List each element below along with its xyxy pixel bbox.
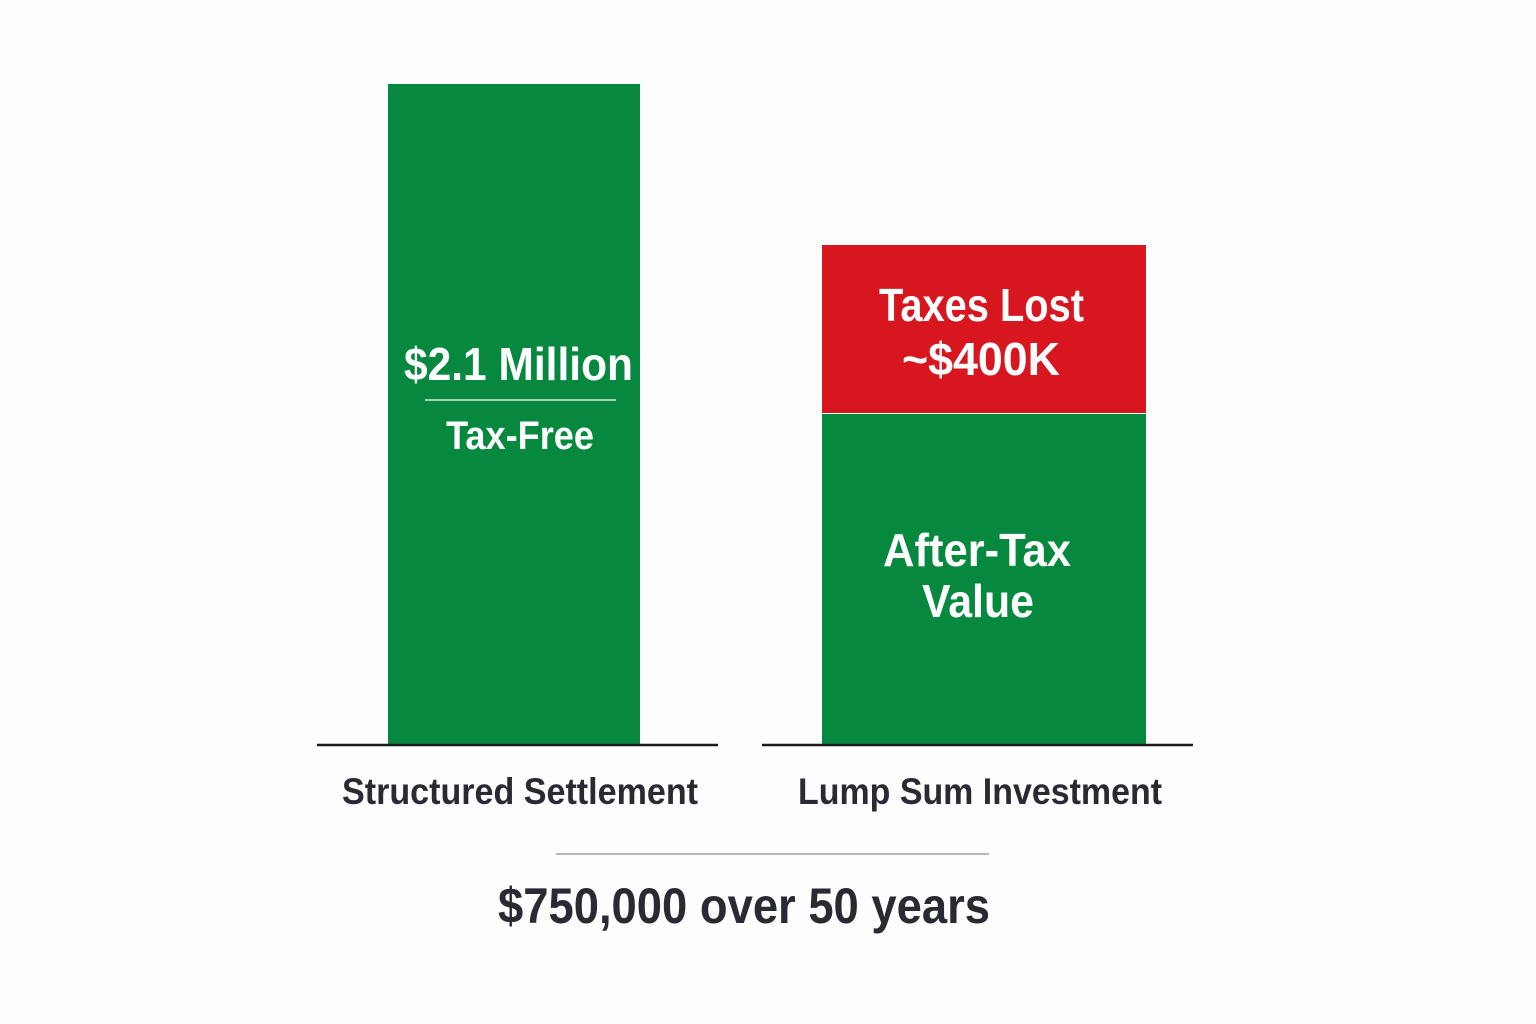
label: Tax-Free: Tax-Free <box>446 414 594 458</box>
label: $2.1 Million: $2.1 Million <box>404 338 633 390</box>
segment: taxes lost: ~$400K <box>902 333 1060 385</box>
segment: taxes lost <box>822 245 1146 413</box>
axis label: lump sum investment: Lump Sum Investment <box>798 771 1162 812</box>
footer caption: $750,000 over 50 years <box>498 878 990 934</box>
segment: after-tax value: Value <box>922 575 1034 627</box>
bar: structured settlement <box>388 84 640 745</box>
segment: taxes lost: Taxes Lost <box>879 279 1084 331</box>
segment: after-tax value: After-Tax <box>883 524 1071 576</box>
axis label: structured settlement: Structured Settlement <box>342 771 698 812</box>
bar: lump sum stacked <box>822 245 1146 745</box>
segment: after-tax value <box>822 414 1146 745</box>
